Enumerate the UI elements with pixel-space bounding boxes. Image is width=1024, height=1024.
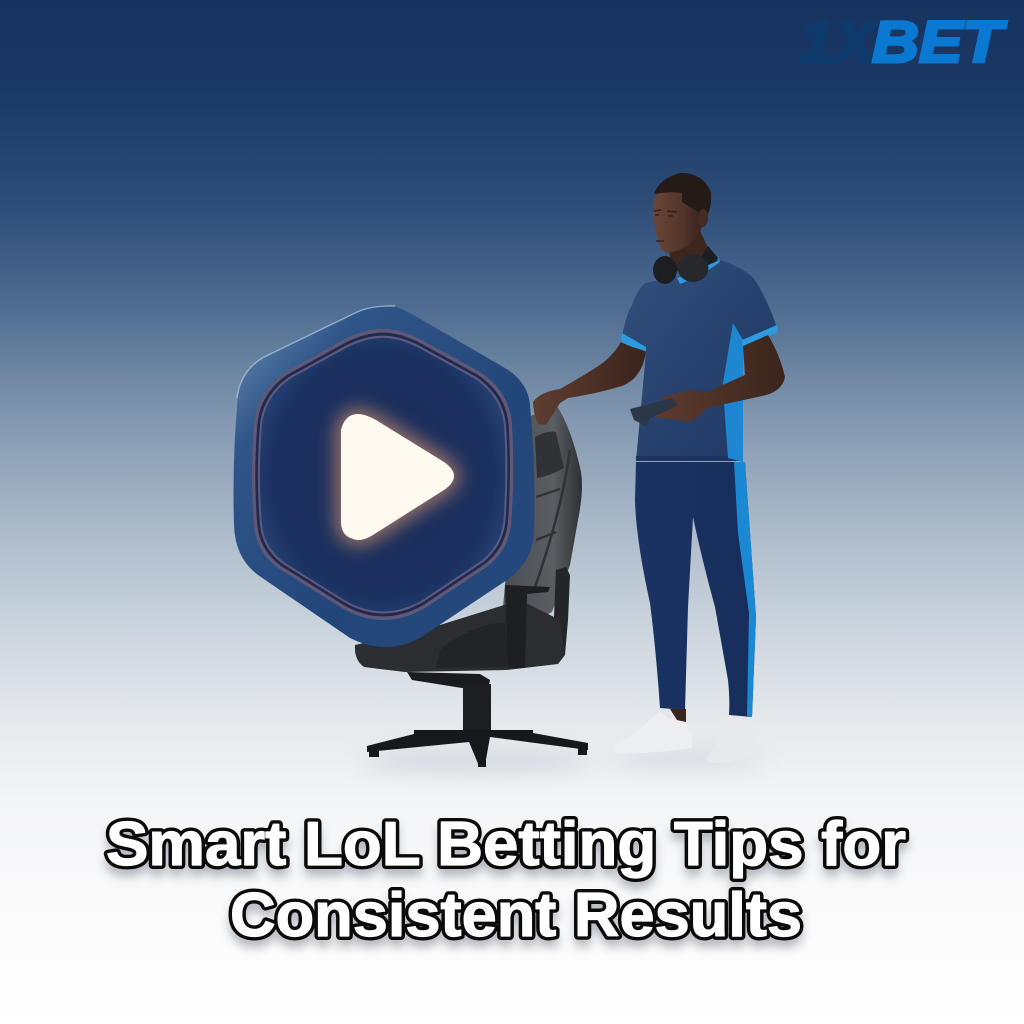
play triangle bbox=[341, 414, 454, 540]
badge ring thin bbox=[258, 336, 507, 614]
shirt side panel bbox=[723, 323, 743, 462]
title shadow: Smart LoL Betting Tips for bbox=[106, 818, 906, 887]
t-shirt bbox=[622, 260, 778, 461]
right ear cup bbox=[678, 254, 708, 282]
logo: 1XBET: BET bbox=[872, 10, 1007, 75]
badge ring outer bbox=[252, 329, 513, 620]
title shadow: Consistent Results bbox=[230, 889, 802, 958]
chair cylinder bbox=[463, 684, 491, 732]
collar accent bbox=[677, 252, 720, 284]
gaming chair bbox=[355, 406, 588, 767]
play icon badge bbox=[234, 305, 534, 647]
chair cushion bbox=[436, 622, 510, 668]
neck bbox=[668, 226, 712, 278]
trousers bbox=[635, 462, 756, 717]
badge outer rim bbox=[234, 305, 534, 647]
badge inner panel bbox=[260, 338, 505, 611]
headphones bbox=[653, 246, 720, 284]
person standing with controller bbox=[533, 173, 785, 763]
chair headrest pillow bbox=[535, 432, 564, 478]
floor shadows bbox=[358, 752, 765, 772]
logo: 1XBET bbox=[799, 10, 1007, 75]
logo: 1XBET: 1X bbox=[799, 10, 879, 75]
ankle bbox=[670, 709, 686, 722]
ear bbox=[698, 209, 708, 227]
title line 1: Smart LoL Betting Tips for bbox=[106, 810, 906, 879]
title line 2: Consistent Results bbox=[230, 881, 802, 950]
right arm bbox=[650, 335, 785, 422]
title line 1 outline: Smart LoL Betting Tips for bbox=[106, 810, 906, 879]
chair tilt mechanism bbox=[407, 672, 490, 690]
hair bbox=[654, 173, 711, 214]
game controller bbox=[630, 398, 678, 426]
chair backrest seams bbox=[534, 450, 570, 590]
badge outer highlight bbox=[237, 306, 395, 398]
headphone band bbox=[698, 246, 718, 272]
left sleeve cuff bbox=[621, 333, 646, 351]
right sleeve cuff bbox=[742, 325, 778, 348]
right shoe bbox=[707, 716, 757, 763]
title bbox=[106, 810, 906, 958]
title shadow bbox=[106, 818, 906, 958]
chair armrest bbox=[505, 585, 550, 668]
chair back side panel bbox=[553, 567, 570, 655]
chair base bbox=[367, 730, 588, 766]
head bbox=[653, 187, 706, 253]
left ear cup bbox=[653, 256, 677, 284]
trouser stripe bbox=[734, 462, 756, 717]
face details bbox=[654, 210, 677, 241]
left arm bbox=[533, 340, 646, 425]
shirt hem bbox=[636, 456, 743, 461]
play glow bbox=[341, 414, 454, 540]
chair feet bbox=[369, 748, 587, 767]
chair backrest bbox=[500, 406, 582, 640]
badge ring dark bbox=[255, 333, 510, 616]
chair seat bbox=[355, 600, 565, 672]
title line 2 outline: Consistent Results bbox=[230, 881, 802, 950]
left shoe bbox=[613, 711, 692, 754]
